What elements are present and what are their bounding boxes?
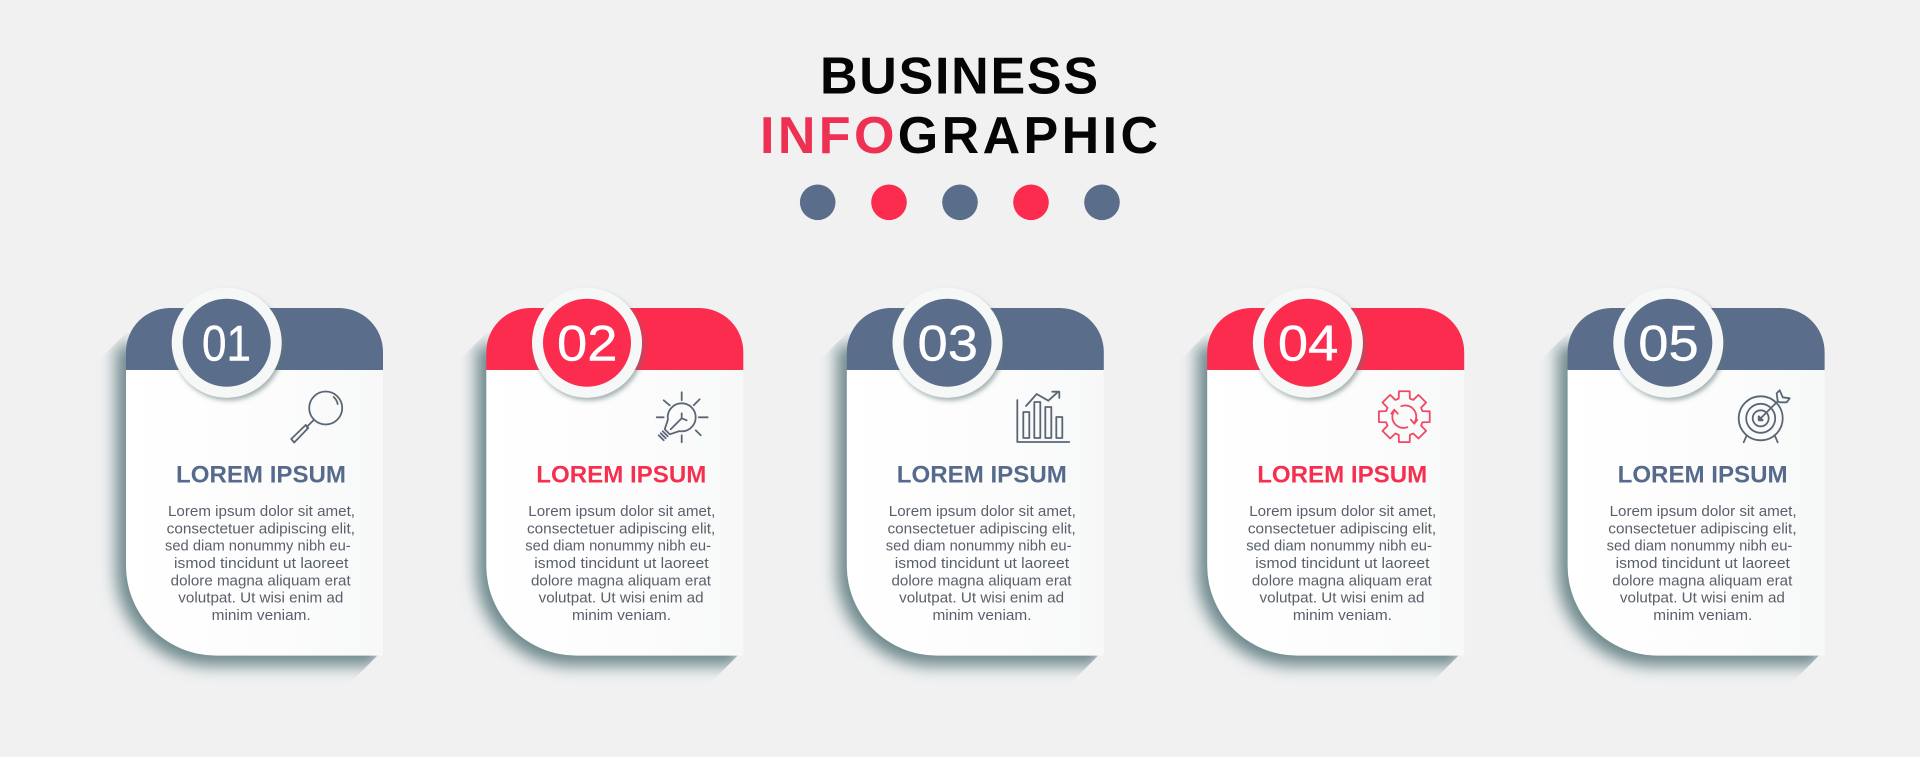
number badge 01 [172, 288, 282, 398]
body text: sed diam nonummy nibh eu- [1246, 539, 1432, 555]
body text: consectetuer adipiscing elit, [527, 521, 715, 537]
body text [886, 504, 1076, 624]
panel: step 03 [837, 288, 1104, 666]
body text: volutpat. Ut wisi enim ad [1620, 591, 1785, 607]
body text: dolore magna aliquam erat [1612, 573, 1792, 589]
title: INFOGRAPHIC [760, 107, 1158, 165]
panel: step 01 [116, 288, 383, 666]
icon: target with arrow [1739, 390, 1790, 442]
body text: sed diam nonummy nibh eu- [886, 539, 1072, 555]
body text: minim veniam. [572, 608, 671, 624]
body text [165, 504, 355, 624]
decorative dots row [800, 184, 1120, 220]
body text: dolore magna aliquam erat [891, 573, 1072, 589]
heading: LOREM IPSUM [1257, 462, 1427, 489]
number badge 01: 01 [202, 316, 251, 372]
number badge 05 [1613, 288, 1723, 398]
body text: minim veniam. [1293, 608, 1392, 624]
title [760, 48, 1158, 165]
number badge 04 [1253, 288, 1363, 398]
body text: dolore magna aliquam erat [171, 573, 351, 589]
body text: consectetuer adipiscing elit, [167, 521, 355, 537]
body text: ismod tincidunt ut laoreet [895, 556, 1069, 572]
body text: consectetuer adipiscing elit, [887, 521, 1076, 537]
body text: minim veniam. [212, 608, 311, 624]
panel: step 04 [1197, 288, 1464, 666]
number badge 02 [532, 288, 642, 398]
heading: LOREM IPSUM [176, 462, 346, 489]
panel: step 02 [476, 288, 743, 666]
body text: Lorem ipsum dolor sit amet, [889, 504, 1076, 520]
heading: LOREM IPSUM [536, 462, 706, 489]
panel: step 05 [1558, 288, 1825, 666]
body text: sed diam nonummy nibh eu- [1607, 539, 1792, 555]
body text [525, 504, 715, 624]
icon: bar chart with rising arrow [1017, 392, 1069, 442]
number badge 03 [892, 288, 1002, 398]
heading: LOREM IPSUM [1618, 462, 1788, 489]
body text [1607, 504, 1797, 624]
number badge 02: 02 [557, 316, 617, 372]
body text: sed diam nonummy nibh eu- [165, 539, 351, 555]
body text: volutpat. Ut wisi enim ad [539, 591, 704, 607]
icon: magnifying glass [291, 392, 342, 442]
body text: minim veniam. [932, 608, 1032, 624]
body text: volutpat. Ut wisi enim ad [899, 591, 1064, 607]
body text: Lorem ipsum dolor sit amet, [1610, 504, 1797, 520]
body text: ismod tincidunt ut laoreet [174, 556, 348, 572]
body text: consectetuer adipiscing elit, [1248, 521, 1436, 537]
body text: ismod tincidunt ut laoreet [534, 556, 709, 572]
body text: Lorem ipsum dolor sit amet, [168, 504, 355, 520]
body text: dolore magna aliquam erat [531, 573, 711, 589]
number badge 03: 03 [917, 316, 978, 372]
number badge 04: 04 [1278, 316, 1338, 372]
icon: light bulb with clock [657, 392, 708, 442]
number badge 05: 05 [1638, 316, 1699, 372]
body text: ismod tincidunt ut laoreet [1616, 556, 1790, 572]
body text: sed diam nonummy nibh eu- [525, 539, 711, 555]
heading: LOREM IPSUM [897, 462, 1067, 489]
body text: minim veniam. [1653, 608, 1752, 624]
body text: volutpat. Ut wisi enim ad [178, 591, 343, 607]
body text: consectetuer adipiscing elit, [1608, 521, 1797, 537]
body text [1246, 504, 1436, 624]
body text: Lorem ipsum dolor sit amet, [528, 504, 715, 520]
body text: dolore magna aliquam erat [1252, 573, 1432, 589]
title: BUSINESS [820, 48, 1098, 106]
icon: gear with refresh arrows [1379, 391, 1430, 442]
body text: volutpat. Ut wisi enim ad [1259, 591, 1424, 607]
body text: Lorem ipsum dolor sit amet, [1249, 504, 1436, 520]
body text: ismod tincidunt ut laoreet [1255, 556, 1429, 572]
